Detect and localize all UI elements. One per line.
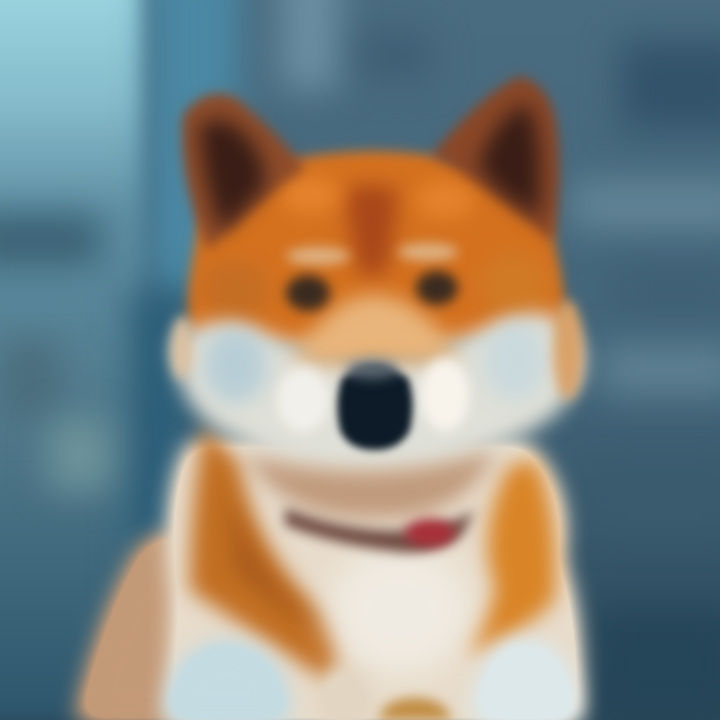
right ear bbox=[432, 76, 559, 242]
chest centre bbox=[328, 545, 472, 675]
forehead highlight right bbox=[415, 182, 475, 218]
chest and shoulders bbox=[170, 445, 579, 720]
collar bbox=[285, 508, 475, 552]
eyes bbox=[286, 271, 458, 311]
raised left leg bbox=[78, 536, 215, 720]
shadow between legs bbox=[320, 670, 370, 720]
right face side bbox=[480, 253, 550, 317]
lower left white paw bbox=[168, 644, 288, 720]
forehead highlight left bbox=[280, 177, 340, 213]
left face side bbox=[200, 260, 270, 320]
brow left bbox=[286, 247, 350, 265]
cheeks and muzzle bbox=[171, 295, 583, 518]
right cheek blue-white bbox=[483, 320, 547, 400]
forehead stripe bbox=[345, 185, 398, 275]
dog body bbox=[78, 425, 579, 720]
lower right white paw bbox=[475, 643, 575, 720]
chin tan bbox=[245, 450, 495, 518]
left ear bbox=[182, 94, 305, 250]
nose bbox=[337, 361, 413, 450]
right edge warm fur bbox=[553, 300, 583, 400]
brow right bbox=[398, 243, 458, 261]
right orange shoulder bbox=[465, 460, 556, 655]
head bbox=[188, 151, 568, 350]
left shoulder dark streak bbox=[225, 480, 320, 630]
left orange shoulder bbox=[190, 425, 338, 685]
left edge warm fur bbox=[171, 316, 193, 380]
muzzle right bright bbox=[421, 359, 469, 431]
face white bbox=[172, 312, 583, 472]
muzzle left bright bbox=[277, 368, 329, 432]
muzzle bridge bbox=[290, 295, 460, 366]
lower belly tan bbox=[378, 698, 452, 720]
left cheek blue-white bbox=[203, 327, 267, 403]
